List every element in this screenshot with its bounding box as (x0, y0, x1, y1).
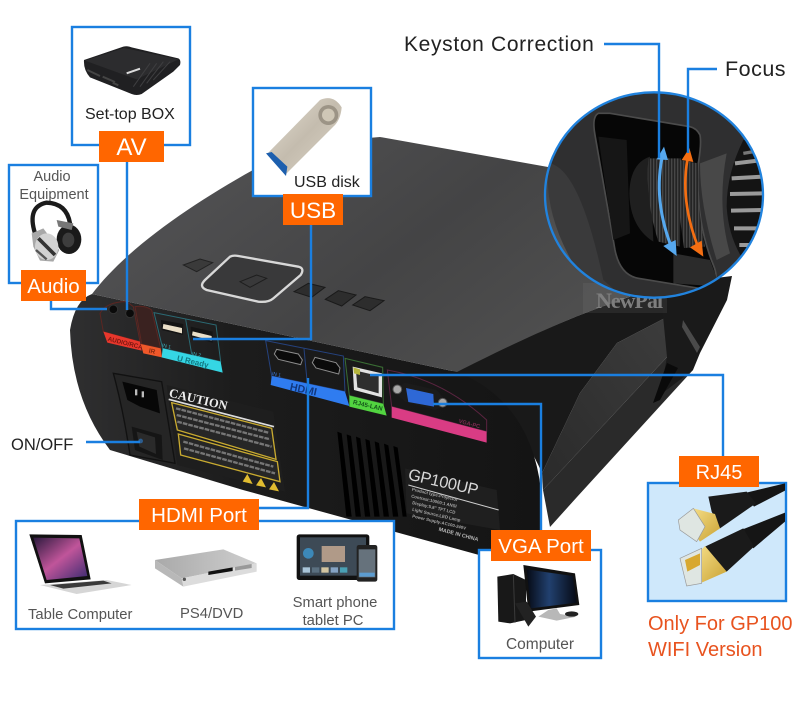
label: Audio Equipment: Audio (33, 169, 71, 185)
port labels: IN 1 (271, 371, 282, 379)
port labels: IN 1 (161, 343, 172, 351)
note: only for GP100 WIFI version: WIFI Version (648, 639, 762, 661)
model label: GP100UP (406, 466, 480, 499)
port labels: IR (148, 348, 156, 356)
label: Audio Equipment: Equipment (19, 187, 89, 203)
label: Smart phone tablet PC: Smart phone (293, 595, 377, 611)
tag: HDMI Port (139, 499, 259, 530)
power inlet and switch (113, 373, 175, 463)
panel: RJ45 cable (648, 456, 786, 601)
icon: DVD player (155, 549, 257, 587)
fan grille (726, 140, 762, 256)
panel: set-top box (72, 27, 190, 162)
side wedge (542, 317, 667, 490)
tag: RJ45 (679, 456, 759, 487)
port labels: U Ready (176, 354, 210, 370)
icon: USB stick (266, 98, 342, 176)
panel: VGA computer (479, 530, 601, 658)
model label: Display:5.8" TFT LCD (412, 500, 456, 515)
icon: headphones (32, 203, 81, 262)
port labels (100, 302, 487, 443)
front face (70, 294, 542, 558)
black shadow band (450, 285, 667, 473)
tag: HDMI Port: HDMI Port (151, 504, 247, 527)
caution label: CAUTION (168, 386, 229, 413)
control panel and ports (100, 256, 487, 517)
blue keystone arrow (657, 147, 677, 256)
model label: Contrast:10000:1 ANSI (411, 493, 457, 509)
HDMI ports (274, 349, 340, 374)
label: USB disk: USB disk (294, 174, 361, 191)
right rear bulge (660, 276, 732, 395)
heading: Keyston Correction: Keyston Correction (404, 33, 594, 56)
watermark (583, 283, 667, 313)
audio jacks (109, 305, 134, 318)
label: PS4/DVD: PS4/DVD (180, 606, 243, 622)
focus rings (629, 157, 705, 248)
tag: Audio: Audio (27, 275, 80, 298)
label: Smart phone tablet PC: tablet PC (303, 613, 364, 629)
panel: audio equipment (9, 165, 98, 301)
tag: USB: USB (290, 198, 336, 223)
top surface (92, 137, 700, 372)
USB ports (161, 320, 213, 343)
heading: Focus: Focus (725, 57, 786, 81)
caution label (167, 385, 285, 492)
model label (405, 466, 500, 543)
tag: VGA Port: VGA Port (498, 535, 584, 558)
tag: AV: AV (116, 134, 147, 161)
label: Set-top BOX: Set-top BOX (85, 106, 175, 123)
lens circle outline (545, 92, 763, 298)
RJ45 port (353, 367, 382, 397)
port labels: HDMI (289, 381, 318, 399)
icon: desktop computer (497, 565, 579, 627)
port labels: IN 2 (191, 351, 202, 359)
label: ON/OFF: ON/OFF (11, 436, 73, 454)
control pad (183, 256, 384, 311)
VGA port (392, 383, 448, 410)
lower side panel (543, 357, 693, 527)
note: only for GP100 WIFI version: Only For GP100 (648, 613, 793, 635)
model label: Power Supply:AC100-240V (412, 513, 467, 531)
tag: RJ45: RJ45 (696, 462, 742, 484)
icon: tablet and phone (297, 534, 377, 582)
watermark: NewPal (596, 288, 663, 313)
port labels: AUDIO/RCA (107, 336, 144, 351)
vent slots (337, 432, 407, 517)
icon: RJ45 cables (678, 483, 785, 586)
panel: USB disk (253, 88, 371, 225)
connector lines (51, 44, 723, 532)
port labels: VGA-PC (458, 419, 481, 430)
projector body (70, 137, 732, 558)
model label: MADE IN CHINA (438, 527, 479, 543)
model label: Light Source:LED Lamp (412, 507, 461, 523)
orange focus arrow (682, 148, 703, 257)
port labels: RJ45-LAN (352, 399, 384, 413)
icon: laptop (29, 534, 132, 594)
label: Table Computer: Table Computer (28, 607, 133, 623)
icon: set-top box (84, 46, 180, 95)
lens close-up circle (544, 91, 764, 299)
panel: HDMI devices (16, 499, 394, 629)
model label: Product type:Projector (411, 487, 459, 502)
lens window (594, 113, 716, 289)
label: Computer: Computer (506, 636, 574, 653)
